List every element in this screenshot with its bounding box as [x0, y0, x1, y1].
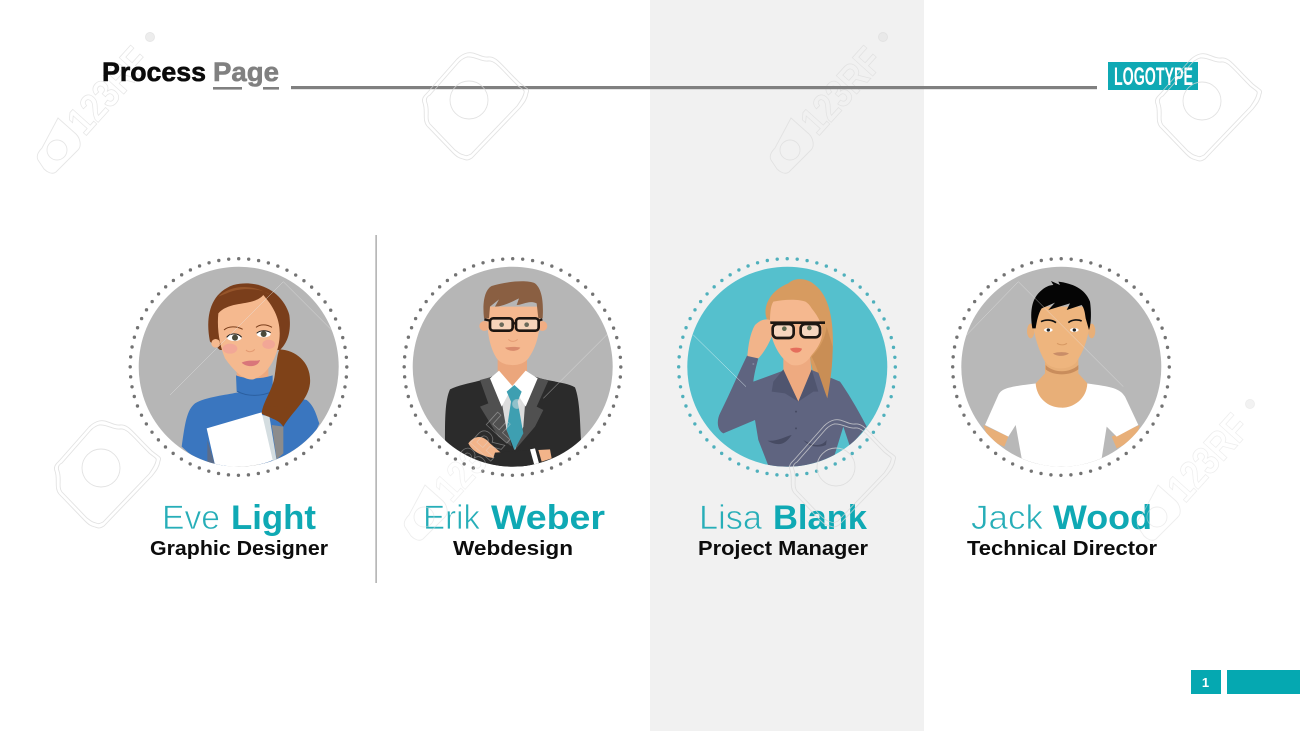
- dotted ring: [130, 259, 347, 475]
- watermark logo: lower right: [1137, 400, 1259, 540]
- watermark logo: top left: [37, 32, 159, 173]
- role: Graphic Designer: [150, 538, 328, 560]
- logo badge: [1108, 62, 1198, 91]
- name: [699, 499, 867, 537]
- portrait disc: [687, 267, 887, 467]
- person: Jack Wood: [953, 259, 1169, 560]
- portrait disc: [413, 267, 613, 467]
- name: [423, 499, 605, 537]
- portrait disc: [961, 267, 1161, 467]
- watermark logo: top centre: 123RF: [792, 39, 892, 143]
- person: Lisa Blank: [679, 259, 895, 560]
- person: Eve Light: [130, 259, 347, 560]
- name: Blank: [773, 499, 867, 537]
- name: [162, 499, 316, 537]
- dotted ring: [404, 259, 621, 475]
- dotted ring: [953, 259, 1169, 475]
- vertical divider: [376, 235, 377, 583]
- name: Wood: [1053, 499, 1152, 537]
- role: Project Manager: [698, 538, 868, 560]
- grey column panel: [650, 0, 924, 731]
- role: Webdesign: [453, 538, 573, 560]
- name: Light: [231, 499, 316, 537]
- page number box: 1: [1202, 675, 1209, 690]
- footer bar: [1227, 670, 1300, 694]
- name: [971, 499, 1152, 537]
- portrait: woman with folder: [170, 282, 333, 467]
- watermark logo: lower left: [404, 400, 526, 540]
- watermark logo: lower left: 123RF: [426, 406, 526, 510]
- portrait: man in suit: [445, 281, 608, 470]
- watermark logo: top left: 123RF: [59, 39, 159, 143]
- name: Erik: [423, 499, 481, 537]
- title: Process Page: [102, 57, 279, 90]
- person: Erik Weber: [404, 259, 621, 560]
- name: Lisa: [699, 499, 762, 537]
- name: Eve: [162, 499, 220, 537]
- name: Jack: [971, 499, 1044, 537]
- title: Process Page: Page: [213, 57, 279, 87]
- logo badge: LOGOTYPE: [1114, 63, 1193, 91]
- watermark eggs: [54, 53, 1262, 528]
- role: Technical Director: [967, 538, 1157, 560]
- page number box: [1191, 670, 1221, 694]
- watermark logo: top centre: [770, 32, 892, 173]
- portrait: woman adjusting glasses: [693, 279, 867, 470]
- watermark logo: lower right: 123RF: [1159, 406, 1259, 510]
- dotted ring: [679, 259, 895, 475]
- portrait: man in white t-shirt: [967, 281, 1140, 473]
- header rule: [291, 86, 1097, 89]
- name: Weber: [491, 499, 605, 537]
- title: Process Page: Process: [102, 57, 206, 87]
- portrait disc: [139, 267, 339, 467]
